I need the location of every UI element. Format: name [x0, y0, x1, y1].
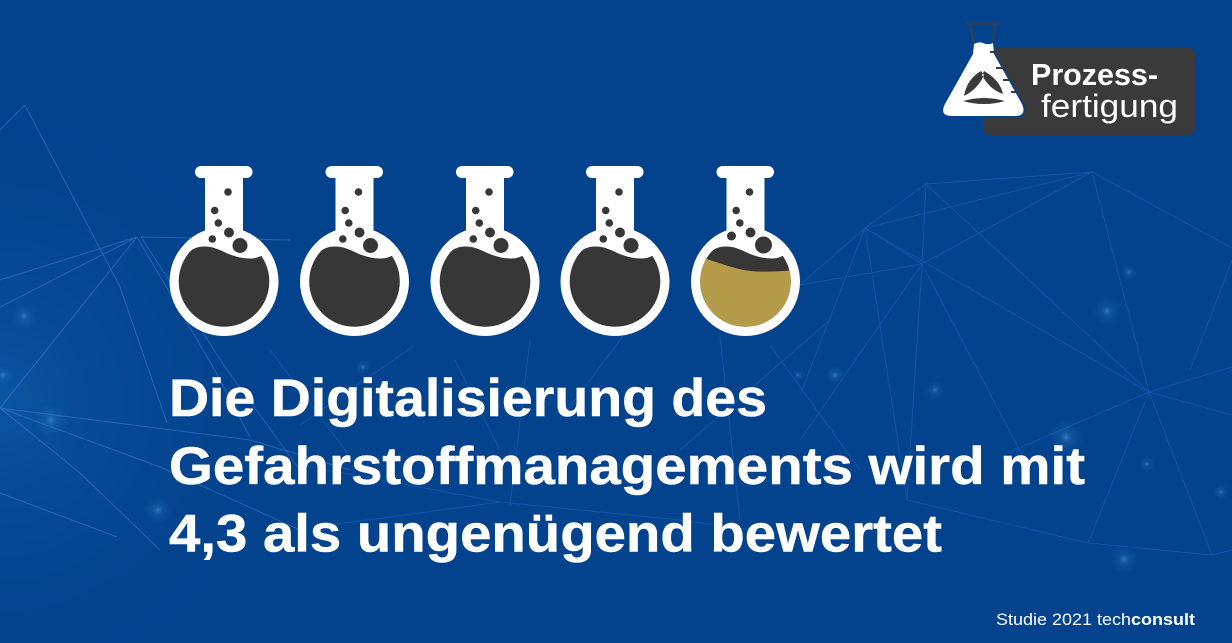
rating flasks: [169, 166, 800, 336]
badge text: Prozess-: [1031, 57, 1158, 92]
badge text: [1031, 57, 1178, 124]
badge: Prozessfertigung: [943, 24, 1195, 135]
source credit: Studie 2021 tech consult: [996, 610, 1195, 629]
badge text: fertigung: [1041, 88, 1178, 124]
background sparkles: [0, 264, 1229, 573]
icon: flask 5 (partial, gold): [690, 166, 800, 336]
background network: left: [0, 105, 350, 550]
icon: flask 4 (full): [560, 166, 670, 336]
icon: flask 1 (full): [169, 166, 279, 336]
icon: flask 2 (full): [300, 166, 410, 336]
headline: Gefahrstoffmanagements wird mit: [169, 437, 1085, 496]
icon: flask 3 (full): [430, 166, 540, 336]
badge panel: [983, 48, 1195, 135]
headline: Die Digitalisierung des: [169, 369, 767, 428]
headline: 4,3 als ungenügend bewertet: [169, 504, 942, 564]
headline: [169, 369, 1085, 564]
background network: centre and right: [270, 172, 1232, 555]
icon: Erlenmeyer flask: [943, 24, 1023, 116]
